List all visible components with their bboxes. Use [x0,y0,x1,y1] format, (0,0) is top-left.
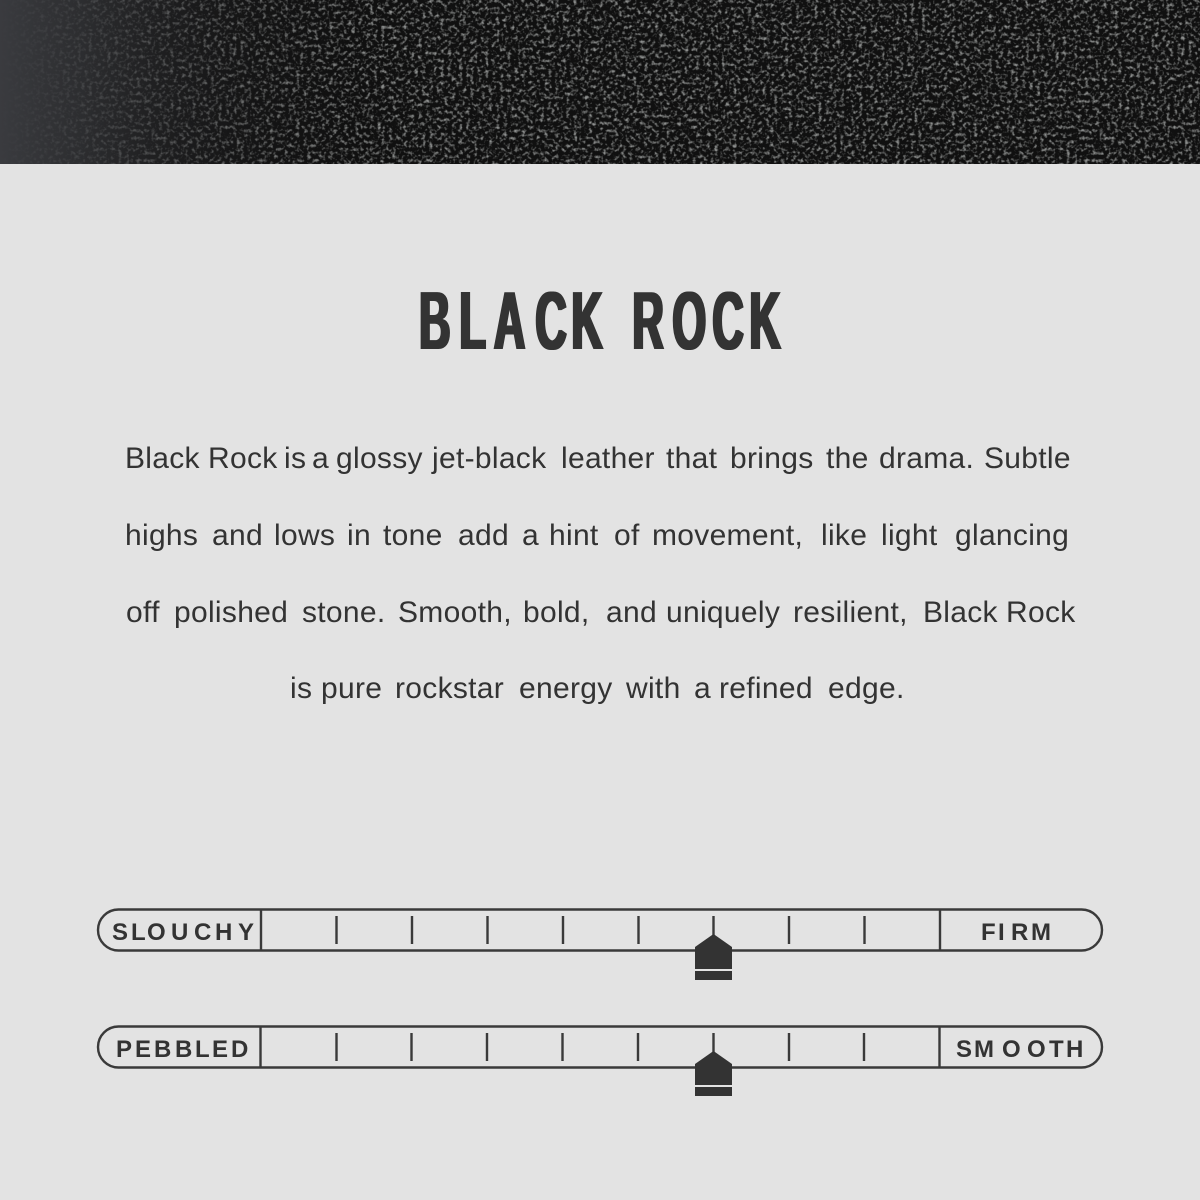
description text: Rock [208,442,278,475]
description text: polished [174,596,288,629]
description text [125,442,1076,705]
description text: highs [125,519,198,552]
description text: glancing [955,519,1069,552]
description text: is [290,672,312,705]
description text: resilient, [793,596,908,629]
title: BLACK ROCK [419,275,781,368]
description text: leather [561,442,655,475]
description text: Rock [1006,596,1076,629]
description text: like [821,519,867,552]
description text: Smooth, [398,596,512,629]
description text: Black [923,596,999,629]
description text: and [606,596,657,629]
description text: of [614,519,640,552]
slider ticks [260,1026,940,1068]
marker [695,934,732,980]
description text: lows [274,519,335,552]
description text: a [312,442,329,475]
description text: Subtle [984,442,1071,475]
slider track [98,1026,1102,1068]
label: slouchy: SLOUCHY [112,919,254,946]
description text: off [126,596,160,629]
description text: bold, [523,596,590,629]
description text: Black [125,442,201,475]
description text: hint [549,519,599,552]
label: smooth: SMOOTH [956,1036,1083,1063]
description text: tone [383,519,443,552]
description text: drama. [879,442,974,475]
description text: movement, [652,519,803,552]
description text: add [458,519,509,552]
description text: rockstar [395,672,504,705]
description text: brings [730,442,814,475]
slider ticks [261,909,940,951]
label: firm: FIRM [981,919,1051,946]
description text: glossy [336,442,423,475]
description text: uniquely [666,596,780,629]
description text: energy [519,672,613,705]
slider track [98,910,1102,950]
description text: a [694,672,711,705]
description text: light [881,519,938,552]
description text: pure [321,672,382,705]
description text: in [347,519,371,552]
description text: is [284,442,306,475]
slider: slouchy to firm [98,909,1102,980]
description text: jet-black [431,442,547,475]
description text: the [826,442,869,475]
description text: with [625,672,681,705]
description text: a [522,519,539,552]
description text: edge. [828,672,905,705]
description text: refined [719,672,813,705]
description text: and [212,519,263,552]
description text: stone. [302,596,386,629]
label: pebbled: PEBBLED [116,1036,248,1063]
marker [695,1051,732,1096]
leather texture banner [0,0,1200,164]
slider: pebbled to smooth [98,1026,1102,1096]
description text: that [666,442,718,475]
